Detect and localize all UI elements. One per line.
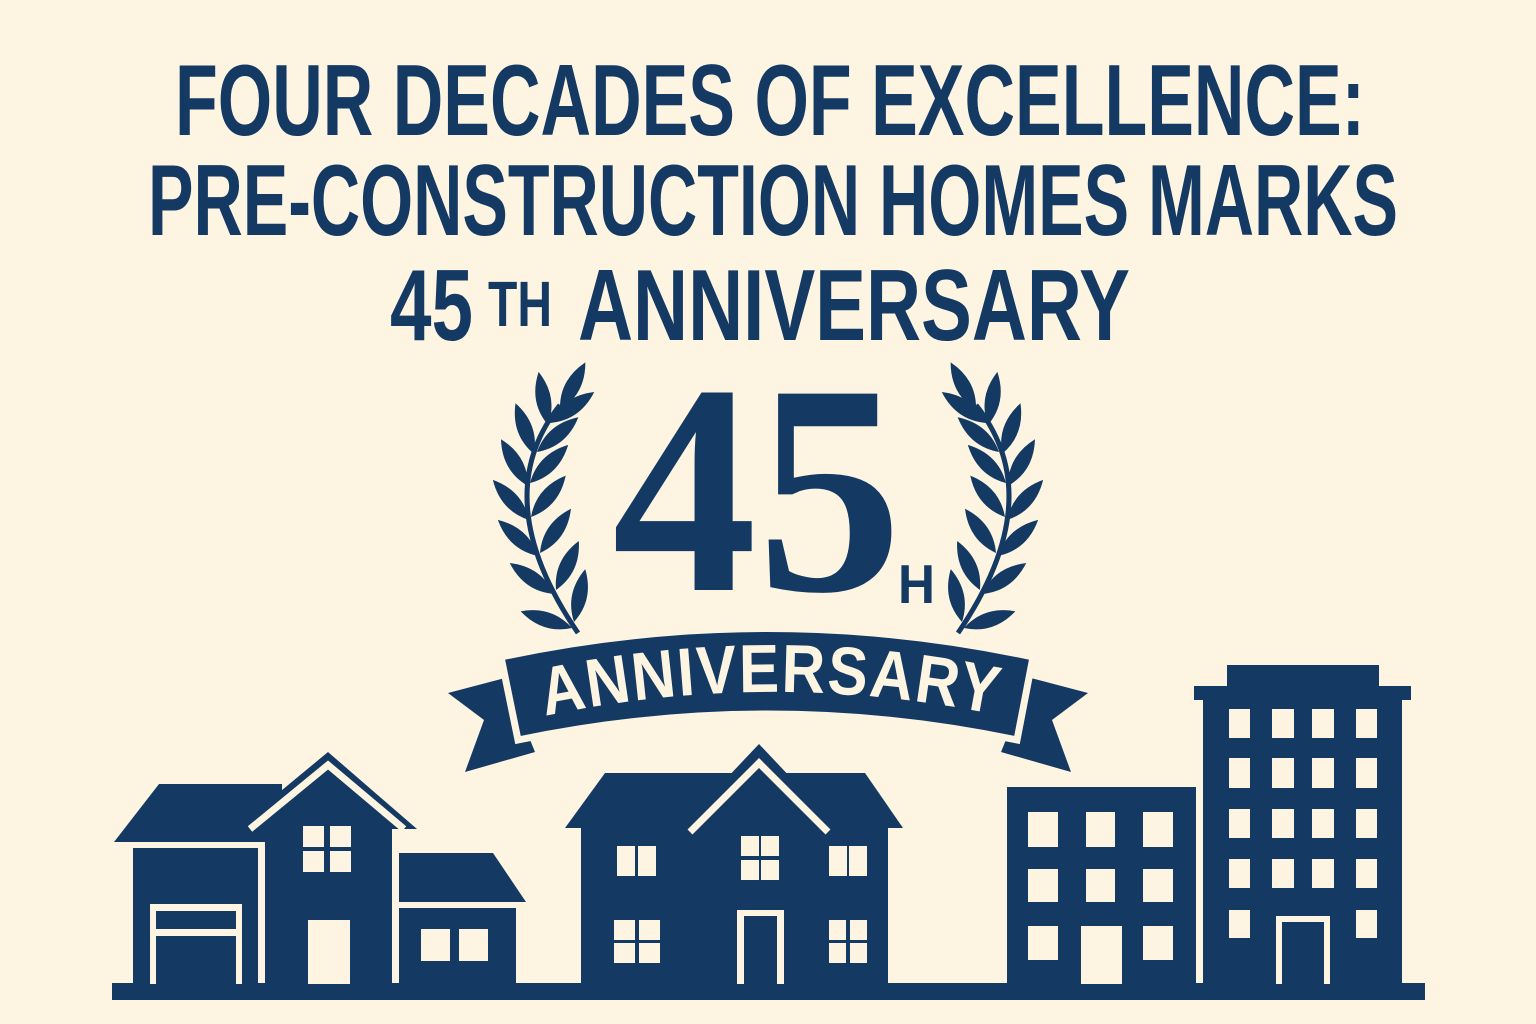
emblem: laurel wreath with 45	[487, 323, 1049, 655]
skyline of homes and buildings	[112, 665, 1425, 1000]
ribbon text: ANNIVERSARY	[546, 645, 1002, 716]
title: 45	[390, 250, 473, 362]
mid-rise building	[1007, 787, 1196, 984]
title: TH	[488, 268, 552, 340]
ribbon tails	[448, 678, 535, 772]
house 1 with garage	[114, 752, 526, 984]
title: ANNIVERSARY	[578, 250, 1130, 362]
title	[148, 45, 1398, 362]
ground bar	[112, 983, 1425, 1000]
ribbon band	[501, 628, 1033, 740]
big number 45: 45	[612, 323, 902, 655]
tall apartment building	[1194, 665, 1411, 984]
small H: H	[898, 553, 935, 615]
icon: left laurel	[487, 359, 599, 635]
icon: right laurel	[937, 359, 1049, 635]
ribbon banner	[448, 632, 1088, 772]
house 2 center	[565, 744, 903, 984]
